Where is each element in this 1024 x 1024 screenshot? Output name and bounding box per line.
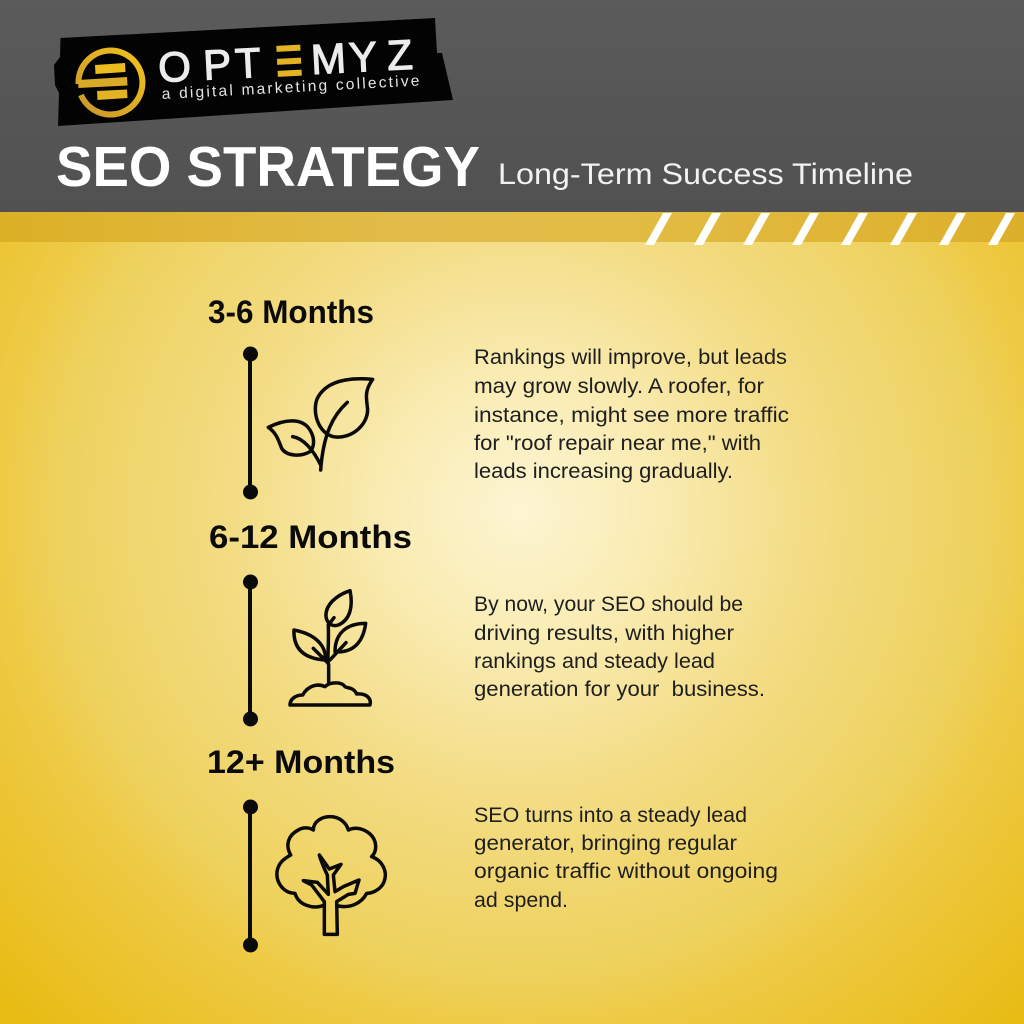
- text: 3-6 months description: Rankings will improve, but leads: [474, 346, 787, 369]
- panel: 3-6 months: [208, 294, 789, 500]
- accent band with diagonal stripes: [0, 212, 1024, 245]
- icon: full tree: [277, 817, 385, 934]
- text: 6-12 months description: [474, 593, 765, 701]
- logo tagline: a digital marketing collective: [161, 73, 420, 103]
- text: 6-12 months description: By now, your SEO should be: [474, 593, 743, 616]
- text: 6-12 months description: rankings and steady lead: [474, 650, 715, 673]
- text: 12+ months description: organic traffic without ongoing: [474, 860, 778, 883]
- header panel: [0, 0, 1024, 212]
- heading: 3-6 Months: 3-6 Months: [208, 294, 374, 330]
- text: 3-6 months description: [474, 346, 789, 483]
- icon: sprout in soil: [290, 591, 370, 705]
- text: 12+ months description: SEO turns into a steady lead: [474, 804, 747, 827]
- text: 3-6 months description: instance, might see more traffic: [474, 404, 789, 427]
- text: 3-6 months description: for "roof repair near me," with: [474, 432, 761, 455]
- panel: 6-12 months: [209, 519, 765, 726]
- text: 6-12 months description: driving results, with higher: [474, 622, 734, 645]
- logo: Optemyz tape badge: [54, 18, 453, 126]
- logo wordmark: OPT EMYZ: [157, 31, 414, 91]
- text: 3-6 months description: may grow slowly. A roofer, for: [474, 375, 764, 398]
- logo emblem: [78, 51, 143, 116]
- heading: 12+ Months: 12+ Months: [207, 744, 395, 780]
- text: 3-6 months description: leads increasing gradually.: [474, 460, 733, 483]
- text: 6-12 months description: generation for your business.: [474, 678, 765, 701]
- text: 12+ months description: [474, 804, 778, 912]
- timeline marker 3: [243, 800, 258, 952]
- title: SEO STRATEGY: [56, 135, 480, 199]
- icon: two-leaf seedling: [268, 379, 373, 470]
- subtitle: Long-Term Success Timeline: [498, 158, 913, 191]
- text: 12+ months description: generator, bringing regular: [474, 832, 737, 855]
- timeline marker 1: [243, 346, 258, 500]
- text: 12+ months description: ad spend.: [474, 889, 568, 912]
- heading: 6-12 Months: 6-12 Months: [209, 519, 412, 555]
- panel: 12+ months: [207, 744, 778, 952]
- timeline marker 2: [243, 574, 258, 726]
